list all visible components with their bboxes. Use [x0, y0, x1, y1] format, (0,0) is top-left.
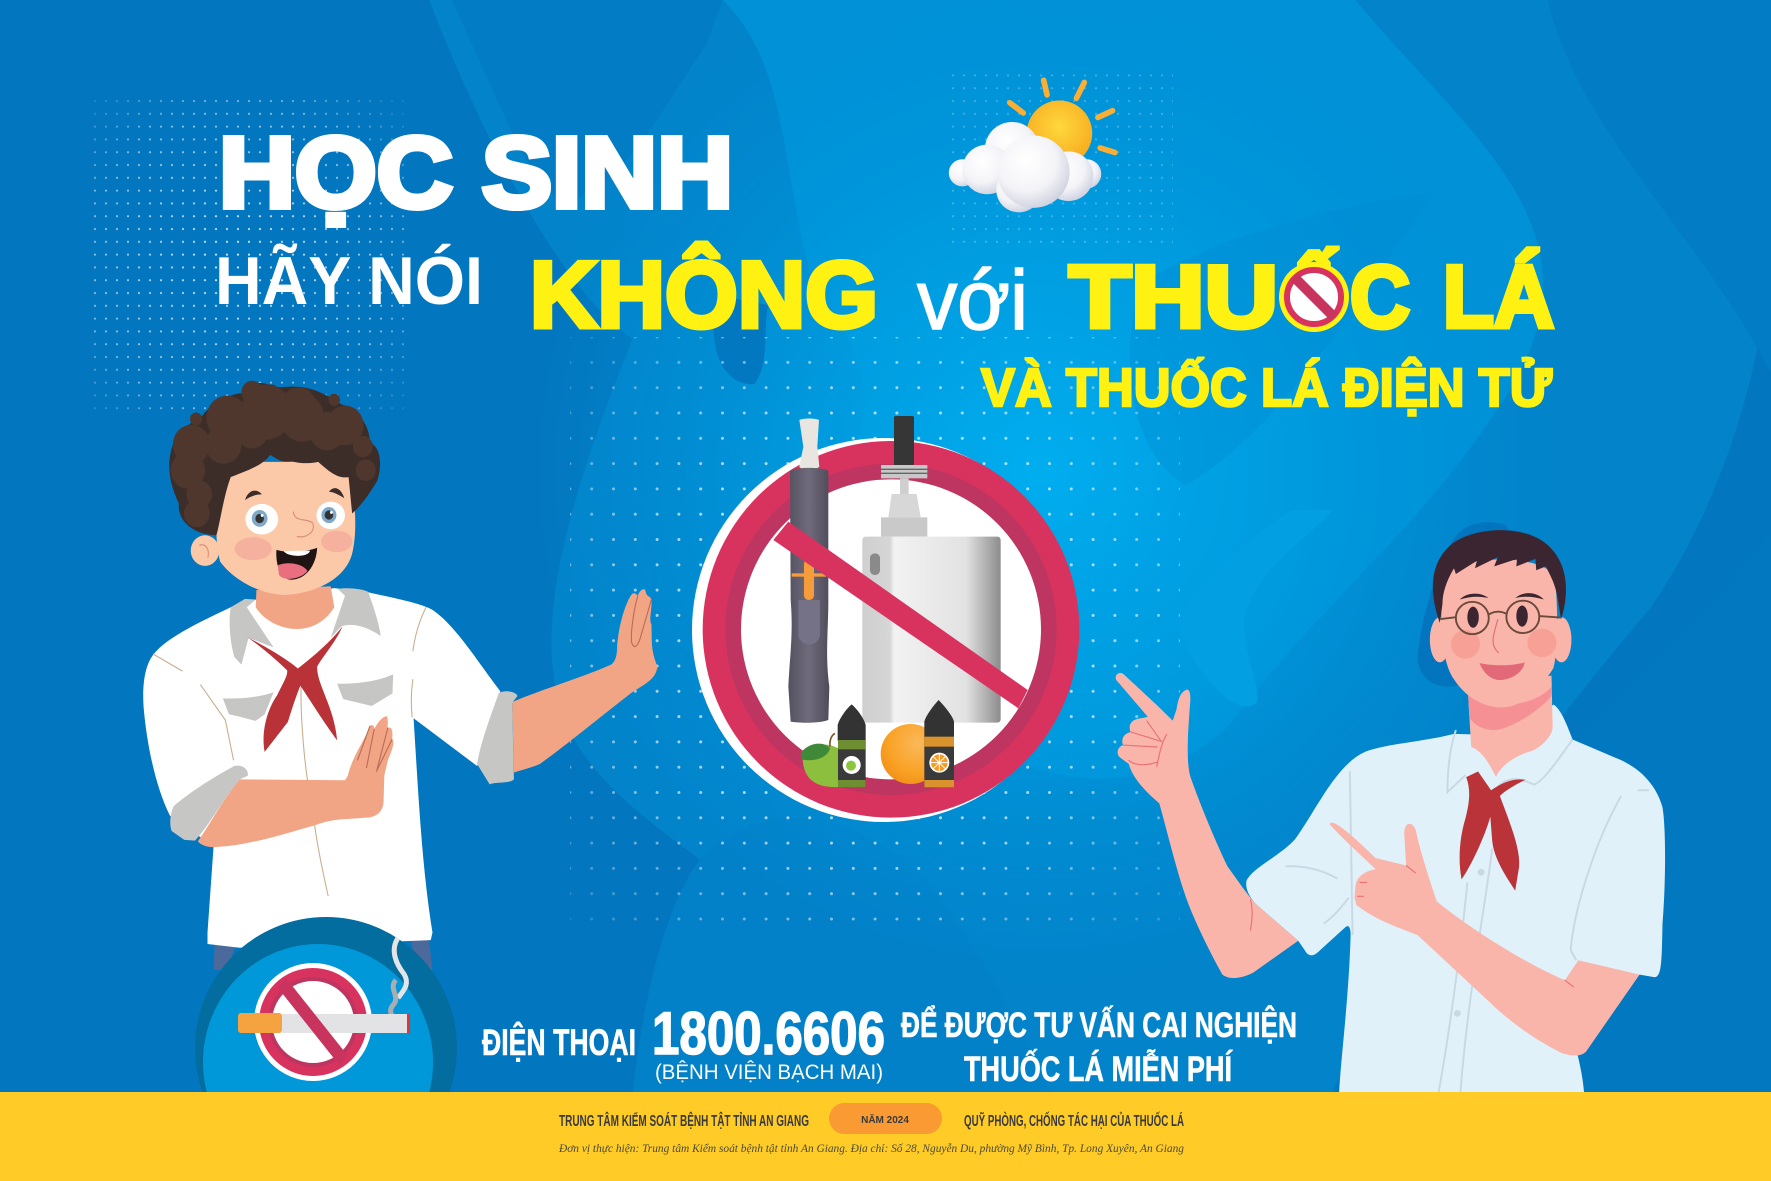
- advice line 1: ĐỂ ĐƯỢC TƯ VẤN CAI NGHIỆN: [901, 1005, 1297, 1045]
- raised arm and pointing hand: [1116, 673, 1298, 978]
- title: THUỐC LÁ: THU: [1069, 247, 1278, 346]
- icon: no sign on letter O: [1279, 262, 1349, 332]
- shirt: [1246, 704, 1665, 1092]
- phone label: ĐIỆN THOẠI: ĐIỆN THOẠI: [482, 1021, 636, 1063]
- icon: smoke: [391, 938, 406, 1024]
- badge: no smoking: [195, 917, 457, 1092]
- face details: [1441, 593, 1561, 680]
- crossed bar: [773, 522, 1028, 708]
- title: THUỐC LÁ: C: [1350, 247, 1410, 346]
- footer band: [0, 1092, 1771, 1181]
- icon: green e-liquid bottle: [838, 704, 866, 787]
- shirt: [143, 588, 500, 948]
- icon: orange fruit: [881, 724, 941, 784]
- shirt lines: [1286, 730, 1649, 1092]
- illustration: no vaping sign: [692, 416, 1079, 822]
- red scarf: [247, 626, 342, 752]
- neck: [1468, 676, 1553, 777]
- icon: vape mod device: [862, 416, 1001, 723]
- title: HỌC SINH: HỌC SINH: [219, 117, 733, 229]
- icon: cigarette: [238, 1013, 410, 1033]
- character: boy with curly hair: [143, 381, 657, 970]
- jeans: [214, 896, 432, 970]
- neck: [256, 586, 334, 629]
- icon: sun behind cloud: [949, 80, 1115, 212]
- halftone dots: [90, 73, 1180, 927]
- raised arm and hand: [512, 589, 657, 773]
- footer: campaign: QUỸ PHÒNG, CHỐNG TÁC HẠI CỦA THUỐC LÁ: [964, 1110, 1184, 1130]
- collar and pockets: [223, 588, 393, 721]
- right cuff: [477, 691, 517, 784]
- icon: heated tobacco pen: [788, 418, 829, 723]
- footer: organisation: TRUNG TÂM KIỂM SOÁT BỆNH TẬT TỈNH AN GIANG: [559, 1111, 809, 1130]
- title: THUỐC LÁ: LÁ: [1443, 247, 1554, 346]
- title: THUỐC LÁ: Ố: [1279, 247, 1349, 346]
- icon: no sign: [254, 963, 372, 1081]
- hair shadow blob: [1418, 522, 1540, 686]
- title: HÃY NÓI: HÃY NÓI: [215, 243, 483, 319]
- title: với: với: [917, 253, 1028, 347]
- finger lines: [1123, 721, 1252, 931]
- title: KHÔNG: KHÔNG: [530, 242, 878, 347]
- icon: green apple: [801, 733, 843, 787]
- ear: [191, 535, 219, 566]
- icon: orange e-liquid bottle: [924, 700, 954, 787]
- shirt seams: [153, 607, 426, 896]
- subtitle: VÀ THUỐC LÁ ĐIỆN TỬ: VÀ THUỐC LÁ ĐIỆN TỬ: [981, 357, 1552, 418]
- hand finger lines: [357, 596, 651, 772]
- curly hair: [169, 381, 380, 535]
- hospital name: (BỆNH VIỆN BẠCH MAI): [655, 1061, 883, 1084]
- character: student with glasses: [1116, 522, 1665, 1092]
- footer: address: Đơn vị thực hiện: Trung tâm Kiểm soát bệnh tật tỉnh An Giang. Địa chỉ: Số 28, Nguyễn Du, phường Mỹ Bình, Tp. Long Xuyên, An Giang: [558, 1142, 1184, 1155]
- ears: [1430, 617, 1571, 662]
- red scarf: [1460, 771, 1526, 891]
- title: THUỐC LÁ: [1069, 247, 1554, 346]
- footer: year pill: [829, 1103, 942, 1134]
- pointing forearm and hand: [1330, 823, 1640, 1056]
- left forearm and hand: [198, 716, 393, 847]
- footer: year pill: NĂM 2024: [861, 1113, 909, 1126]
- hotline number: 1800.6606: [652, 1000, 885, 1067]
- hair: [1433, 530, 1566, 623]
- face details: [235, 488, 352, 580]
- face: [216, 462, 355, 595]
- left cuff: [170, 766, 248, 841]
- face: [1441, 559, 1557, 707]
- advice line 2: THUỐC LÁ MIỄN PHÍ: [964, 1049, 1233, 1089]
